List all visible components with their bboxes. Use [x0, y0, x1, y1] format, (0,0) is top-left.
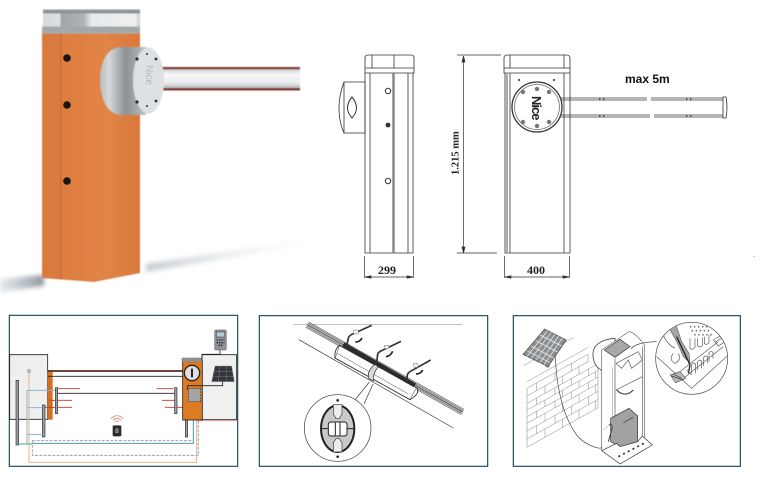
panel: beam mounting detail	[259, 316, 488, 466]
rotation arrows	[355, 338, 423, 374]
detail circle	[656, 322, 728, 394]
barrier open cabinet	[593, 332, 644, 457]
metal drum	[100, 47, 164, 115]
side view drawing	[339, 55, 414, 253]
beam	[160, 67, 300, 90]
solar cable	[555, 357, 609, 448]
disc logo: Nice	[529, 96, 544, 120]
front view body	[505, 73, 570, 253]
right wall	[202, 355, 237, 420]
photo: orange barrier with beam	[0, 10, 300, 292]
barrier body	[42, 33, 140, 282]
hatched rail	[307, 325, 463, 412]
detail leader	[631, 342, 657, 349]
side view cap	[365, 55, 414, 73]
panel: installation layout	[9, 315, 238, 466]
dimension: height 1.215 mm	[450, 55, 501, 253]
label: max 5m: max 5m	[625, 72, 670, 86]
dimension: width 400: 400	[527, 263, 545, 277]
disc bolts	[518, 79, 555, 128]
remote with wireless signal	[111, 416, 123, 436]
dimension: width 400	[504, 256, 570, 278]
left wall	[10, 355, 48, 419]
cross section callout	[304, 395, 371, 461]
dimension: width 299: 299	[378, 263, 396, 277]
handheld programmer	[215, 330, 226, 350]
photocell beams	[43, 389, 187, 407]
remote with wireless signal: 8	[115, 428, 119, 435]
left post	[48, 371, 53, 420]
drum logo: Nice	[143, 65, 154, 85]
wiring	[17, 371, 198, 462]
dimension: width 299	[364, 256, 414, 278]
panel: solar installation	[513, 316, 740, 466]
callout leader	[354, 382, 373, 404]
side view drum	[339, 82, 365, 133]
control unit	[182, 358, 202, 420]
front view cap	[504, 55, 570, 73]
hook wrenches	[347, 325, 431, 383]
battery box	[611, 408, 638, 447]
floor shadow	[0, 240, 300, 292]
base plate	[602, 436, 652, 464]
barrier cap	[42, 10, 140, 34]
beam sleeve	[335, 345, 417, 400]
solar panel	[523, 329, 566, 368]
joint collar	[368, 364, 378, 381]
drum bolts	[135, 53, 157, 107]
body holes	[63, 54, 71, 185]
front view drawing	[504, 55, 727, 253]
front view disc	[512, 82, 562, 132]
small speck	[753, 256, 755, 257]
solar panel	[212, 366, 234, 382]
beam lines	[48, 368, 183, 373]
beam with break	[561, 97, 723, 118]
side view body	[365, 73, 413, 253]
dimension: height 1.215 mm: 1.215 mm	[450, 131, 462, 175]
left columns	[16, 380, 58, 445]
right columns	[175, 388, 188, 437]
side view holes	[385, 88, 391, 94]
brick wall	[524, 338, 598, 447]
